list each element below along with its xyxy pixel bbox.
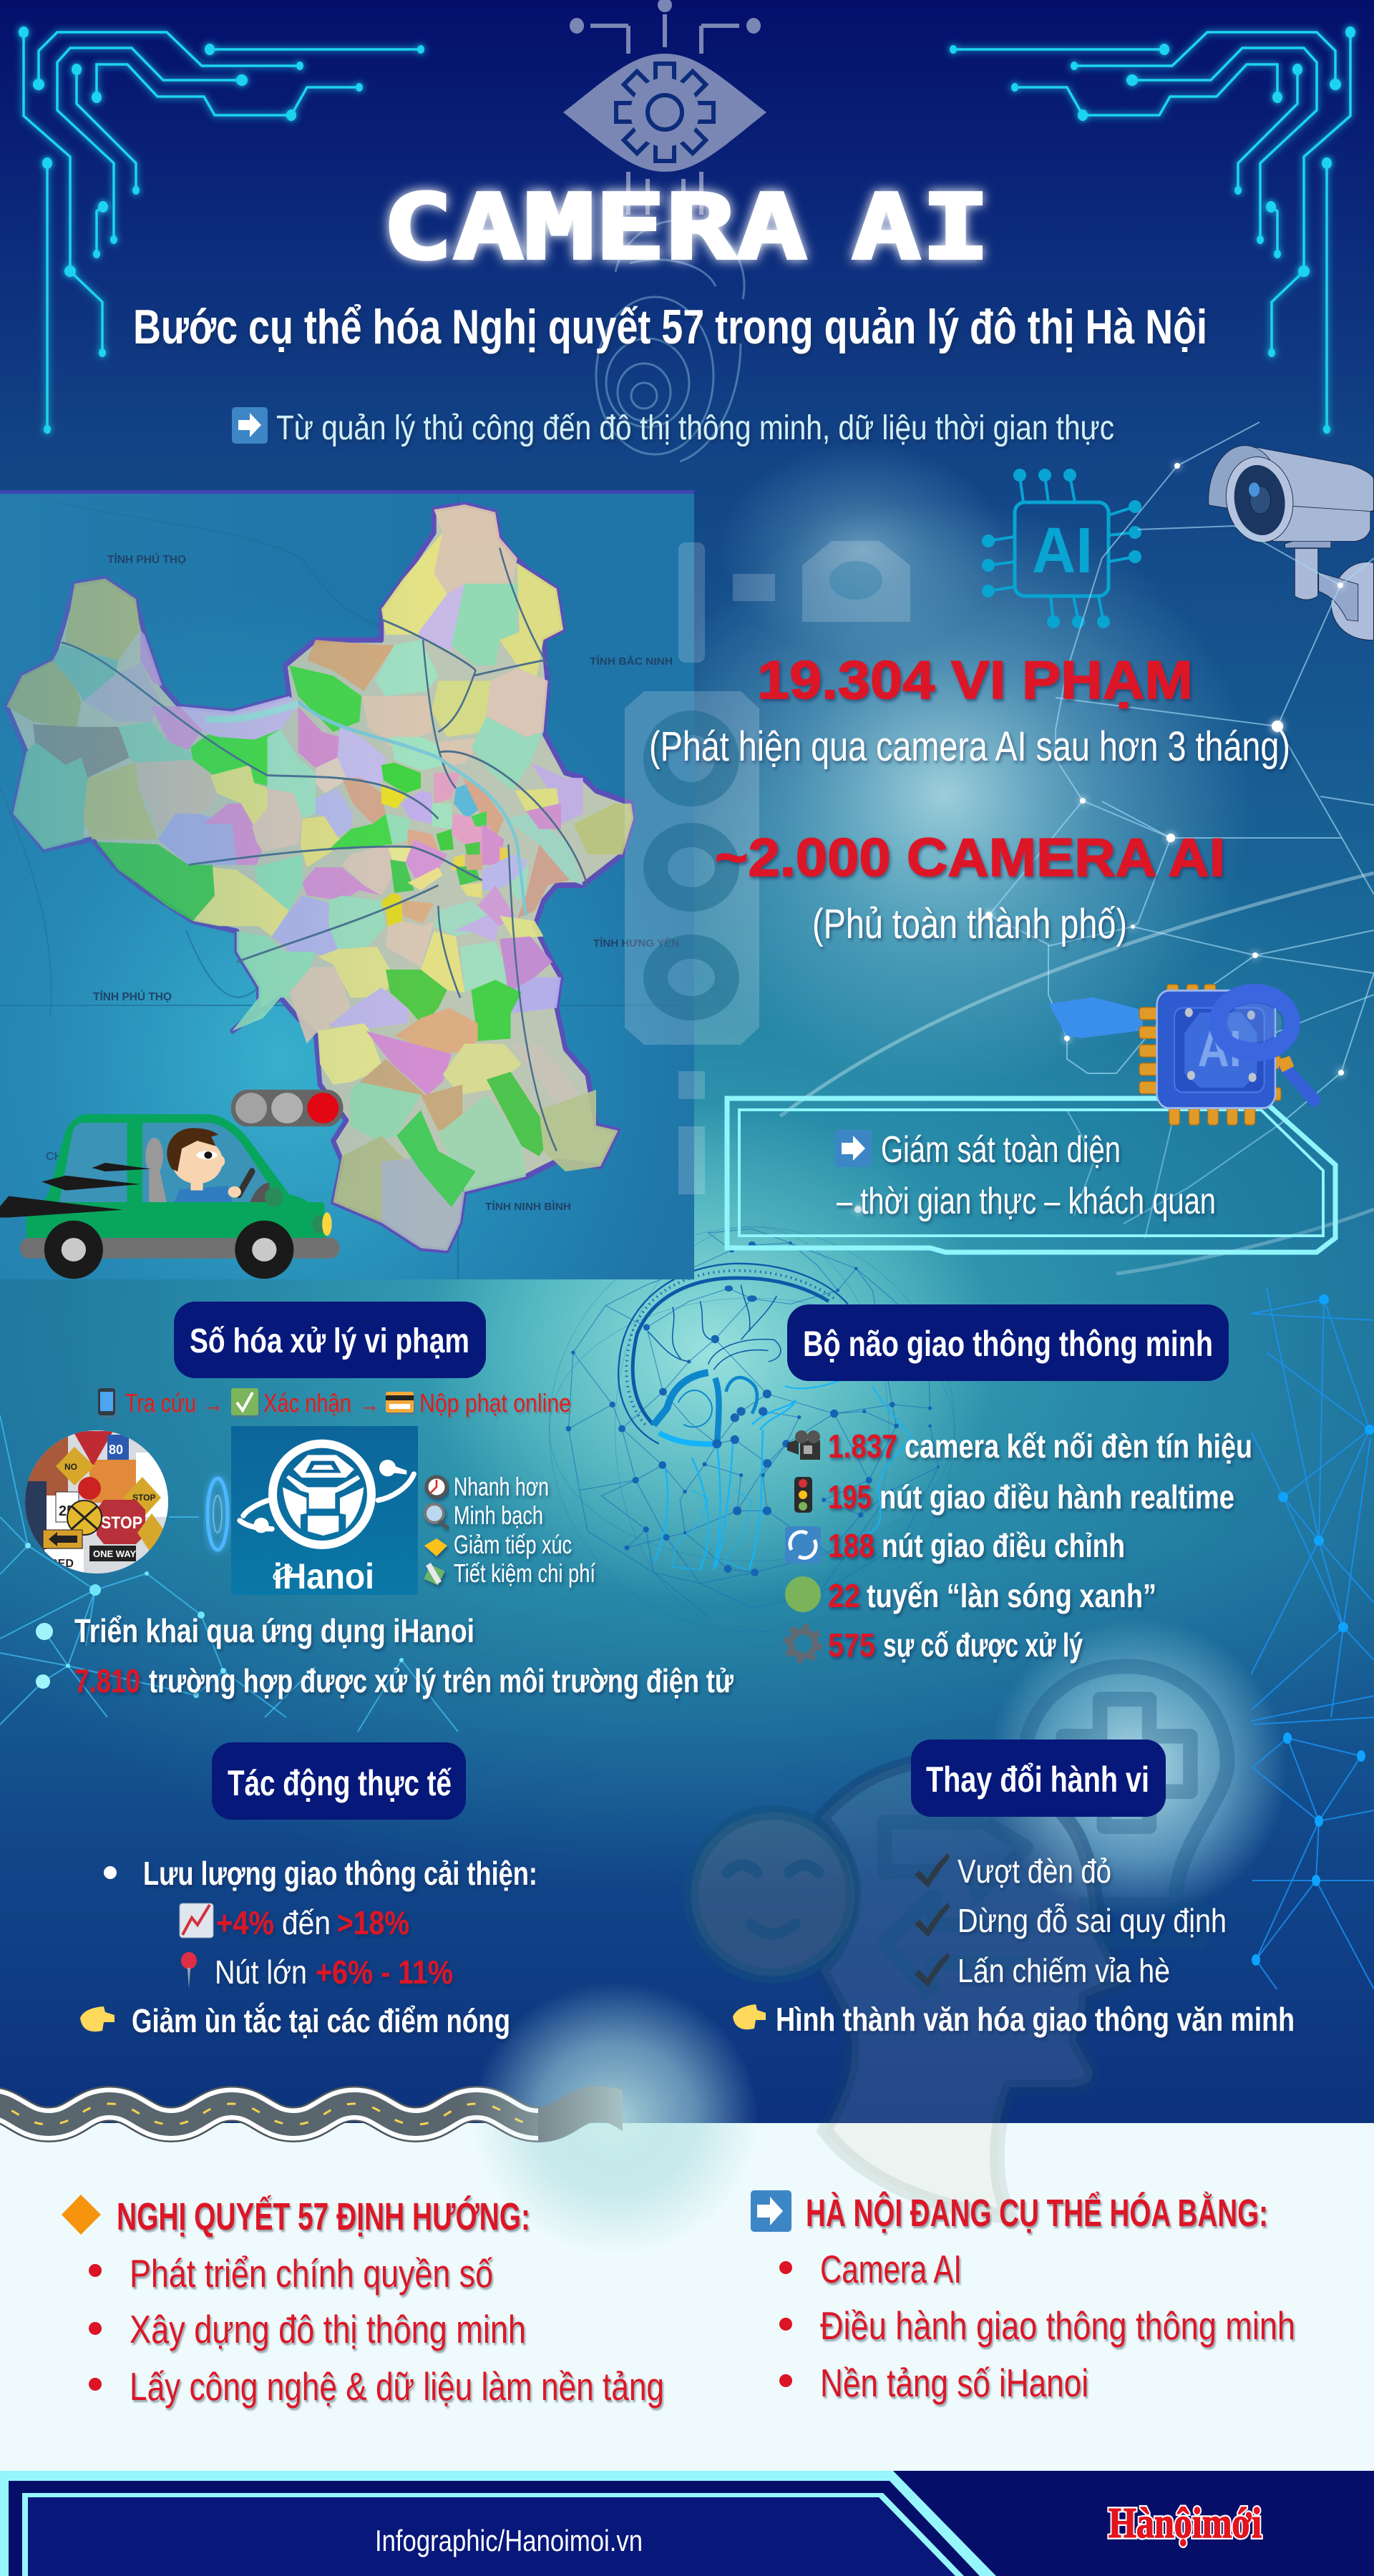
icon: traffic signs collage: 80 bbox=[109, 1443, 123, 1457]
decorative signal rings behind title bbox=[596, 220, 744, 462]
tagline: Từ quản lý thủ công đến đô thị thông minh, dữ liệu thời gian thực bbox=[276, 409, 1114, 447]
icon: chip with magnifier: AI bbox=[1198, 1021, 1242, 1078]
callout: monitoring frame bbox=[727, 1098, 1335, 1252]
smart traffic brain stats: sự cố được xử lý bbox=[883, 1626, 1083, 1664]
car illustration with driver and traffic light bbox=[0, 1090, 344, 1279]
real impact list: Giảm ùn tắc tại các điểm nóng bbox=[132, 2002, 510, 2039]
smart traffic brain stats: tuyến “làn sóng xanh” bbox=[867, 1577, 1156, 1614]
footer band: Infographic/Hanoimoi.vn bbox=[375, 2524, 643, 2557]
stat: cameras caption: (Phủ toàn thành phố) bbox=[812, 901, 1127, 947]
icon: eye with gear bbox=[563, 0, 766, 215]
real impact list: >18% bbox=[337, 1904, 409, 1941]
panel: conclusions background bbox=[0, 2123, 1374, 2471]
smart traffic brain stats: nút giao điều hành realtime bbox=[880, 1478, 1234, 1516]
real impact list: đến bbox=[282, 1904, 331, 1941]
behavior change list bbox=[733, 1853, 1295, 2038]
smart traffic brain stats: nút giao điều chỉnh bbox=[882, 1527, 1125, 1564]
panel: Resolution 57 orientation bbox=[62, 2195, 664, 2409]
smart traffic brain stats: 22 bbox=[828, 1577, 860, 1614]
section heading: Số hóa xử lý vi phạm: Số hóa xử lý vi phạm bbox=[190, 1322, 469, 1360]
flow: online fine process: Xác nhận bbox=[263, 1388, 351, 1418]
section heading: Bộ não giao thông thông minh bbox=[787, 1304, 1229, 1381]
smart traffic brain stats bbox=[785, 1428, 1252, 1664]
panel: Resolution 57 orientation: NGHỊ QUYẾT 57 ĐỊNH HƯỚNG: bbox=[117, 2195, 530, 2238]
road ribbon bbox=[0, 2104, 661, 2124]
panel: Hanoi map: TỈNH PHÚ THỌ bbox=[107, 552, 186, 566]
panel: Hanoi implementation bbox=[751, 2190, 1295, 2405]
panel: Hanoi map: TỈNH PHÚ THỌ bbox=[93, 990, 172, 1003]
left circuit lines bbox=[19, 26, 424, 434]
section heading: Tác động thực tế: Tác động thực tế bbox=[228, 1763, 452, 1803]
panel: Hanoi map: TỈNH HƯNG YÊN bbox=[593, 937, 679, 950]
icon: traffic signs collage: 25 bbox=[59, 1503, 74, 1519]
iHanoi bullets: Triển khai qua ứng dụng iHanoi bbox=[74, 1612, 474, 1649]
behavior change list: Dừng đỗ sai quy định bbox=[958, 1902, 1227, 1939]
icon: traffic signs collage: SED bbox=[50, 1558, 74, 1570]
title: CAMERA bbox=[382, 175, 807, 280]
brain wireframe illustration bbox=[422, 1102, 995, 1632]
icon: traffic signs collage: STOP bbox=[101, 1513, 142, 1533]
panel: Hanoi map: CHÚ GIẢI bbox=[46, 1149, 97, 1163]
benefits list: Nhanh hơn bbox=[454, 1472, 549, 1501]
network lines upper right bbox=[780, 422, 1374, 1274]
icon: traffic signs collage: STOP bbox=[132, 1493, 155, 1503]
panel: Resolution 57 orientation: Phát triển chính quyền số bbox=[130, 2251, 493, 2296]
smart traffic brain stats: 195 bbox=[828, 1478, 872, 1516]
footer band bbox=[0, 2471, 1374, 2576]
real impact list: +6% - 11% bbox=[316, 1953, 453, 1991]
flow: online fine process: → bbox=[203, 1391, 223, 1417]
panel: Hanoi map: TỈNH NINH BÌNH bbox=[485, 1201, 571, 1213]
benefits list: Tiết kiệm chi phí bbox=[454, 1558, 595, 1588]
icon: traffic signs collage: ONE WAY bbox=[93, 1548, 137, 1559]
flow: online fine process bbox=[98, 1388, 571, 1418]
panel: Hanoi map bbox=[0, 490, 694, 1279]
right network lines bbox=[1251, 1288, 1374, 2025]
real impact list: Lưu lượng giao thông cải thiện: bbox=[143, 1855, 537, 1892]
panel: Resolution 57 orientation: Xây dựng đô thị thông minh bbox=[130, 2307, 526, 2351]
benefits list: Giảm tiếp xúc bbox=[454, 1530, 572, 1559]
real impact list bbox=[80, 1855, 537, 2039]
behavior change list: Vượt đèn đỏ bbox=[958, 1853, 1111, 1890]
decorative traffic light silhouette bbox=[625, 541, 910, 1194]
icon: iHanoi app tile: iHanoi bbox=[273, 1556, 374, 1596]
icon: AI chip: AI bbox=[1032, 515, 1093, 587]
icon: chip with magnifier bbox=[1048, 985, 1321, 1125]
icon: traffic signs collage: NO bbox=[64, 1462, 77, 1472]
benefits list bbox=[424, 1472, 595, 1588]
right circuit lines bbox=[950, 26, 1355, 434]
flow: online fine process: Nộp phạt online bbox=[419, 1388, 571, 1418]
flow: online fine process: → bbox=[359, 1391, 379, 1417]
section heading: Thay đổi hành vi bbox=[911, 1740, 1166, 1817]
icon: iHanoi app tile bbox=[231, 1426, 418, 1596]
callout: monitoring frame: – thời gian thực – khách quan bbox=[837, 1181, 1216, 1222]
flow: online fine process: Tra cứu bbox=[125, 1388, 196, 1418]
glow behind light bulb bbox=[987, 1619, 1287, 1919]
behavior change list: Lấn chiếm vỉa hè bbox=[958, 1952, 1170, 1989]
iHanoi bullets bbox=[36, 1612, 734, 1699]
iHanoi bullets: 7.810 bbox=[74, 1662, 140, 1699]
glow over road and panel edge bbox=[472, 1982, 759, 2254]
section heading: Số hóa xử lý vi phạm bbox=[174, 1302, 486, 1378]
iHanoi bullets: trường hợp được xử lý trên môi trường điện tử bbox=[149, 1662, 734, 1699]
left network lines bbox=[0, 1415, 458, 1732]
icon: glowing portal bbox=[208, 1478, 228, 1550]
stat: cameras: ~2.000 CAMERA AI bbox=[715, 827, 1225, 887]
footer band: Hànộimới bbox=[1109, 2499, 1262, 2547]
title: AI bbox=[852, 175, 990, 280]
panel: Hanoi implementation: Camera AI bbox=[820, 2247, 962, 2291]
real impact list: Nút lớn bbox=[215, 1953, 307, 1991]
section heading: Tác động thực tế bbox=[212, 1742, 466, 1820]
footer band: Hànộimới bbox=[1109, 2499, 1262, 2547]
title bbox=[382, 175, 990, 280]
real impact list: +4% bbox=[216, 1904, 274, 1941]
smart traffic brain stats: camera kết nối đèn tín hiệu bbox=[905, 1428, 1252, 1465]
panel: Resolution 57 orientation: Lấy công nghệ & dữ liệu làm nền tảng bbox=[130, 2364, 664, 2409]
icon: traffic signs collage bbox=[25, 1430, 168, 1574]
benefits list: Minh bạch bbox=[454, 1501, 543, 1530]
icon: AI chip bbox=[982, 469, 1141, 628]
section heading: Thay đổi hành vi: Thay đổi hành vi bbox=[926, 1760, 1149, 1800]
callout: monitoring frame: Giám sát toàn diện bbox=[881, 1129, 1121, 1171]
panel: Hanoi map: TỈNH BẮC NINH bbox=[590, 655, 673, 668]
smart traffic brain stats: 188 bbox=[828, 1527, 874, 1564]
smart traffic brain stats: 575 bbox=[828, 1626, 875, 1664]
smart traffic brain stats: 1.837 bbox=[828, 1428, 897, 1465]
stat: violations: 19.304 VI PHẠM bbox=[757, 650, 1193, 710]
icon: security camera bbox=[1209, 446, 1373, 640]
section heading: Bộ não giao thông thông minh: Bộ não giao thông thông minh bbox=[803, 1324, 1213, 1364]
panel: Hanoi implementation: Nền tảng số iHanoi bbox=[820, 2361, 1088, 2405]
head silhouette with smile and light bulb bbox=[691, 1667, 1227, 2217]
